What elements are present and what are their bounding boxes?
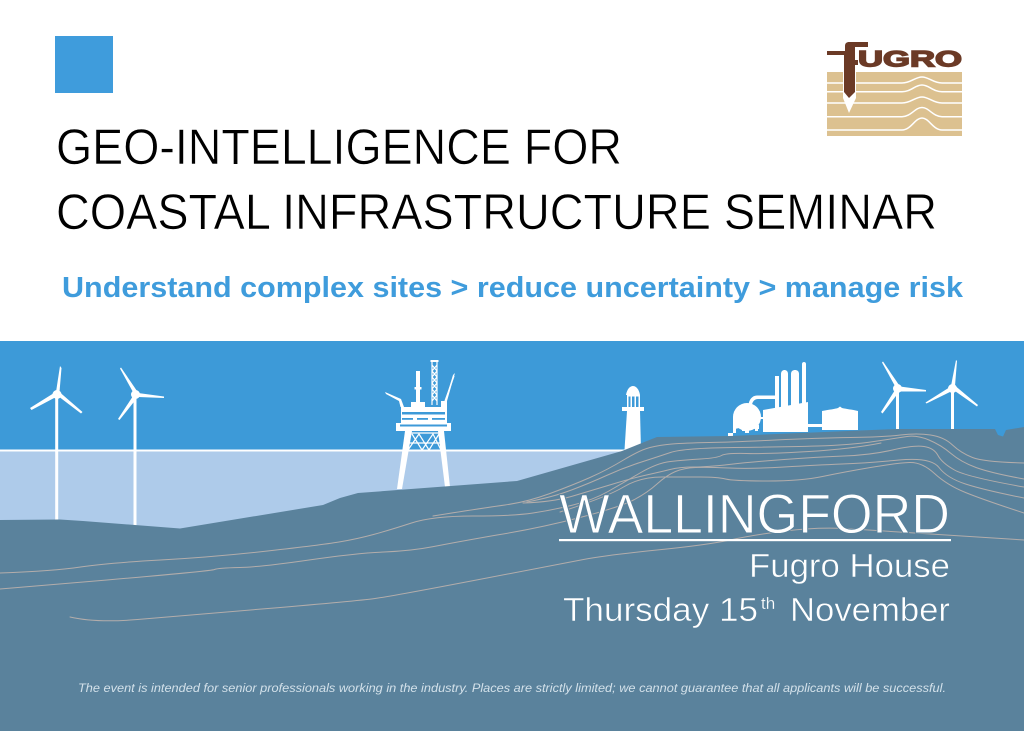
geological contour lines [0,434,1024,621]
icon: lighthouse [622,386,644,450]
event date: Thursday 15 [563,591,758,628]
icon: wind turbine 1 [30,366,82,522]
icon: offshore oil rig [385,360,455,489]
event date: November [790,591,950,628]
icon: wind turbine 2 [118,368,164,526]
sea [0,451,640,551]
title: COASTAL INFRASTRUCTURE SEMINAR [56,184,937,240]
icon: wind turbine 4 [926,360,978,432]
seabed and land [0,427,1024,731]
icon: Fugro logo [827,42,962,136]
icon: Fugro logo: UGRO [858,46,962,72]
title [56,119,937,240]
venue name: Fugro House [749,547,950,584]
sky band [0,341,1024,451]
title: GEO-INTELLIGENCE FOR [56,119,622,175]
subtitle: Understand complex sites > reduce uncertainty > manage risk [62,272,964,304]
horizon line [0,450,640,452]
blue square [55,36,113,93]
icon: refinery [728,362,858,437]
venue heading: WALLINGFORD [559,482,950,545]
icon: wind turbine 3 [881,362,926,432]
disclaimer note: The event is intended for senior professionals working in the industry. Places are strictly limited; we cannot guarantee that all applicants will be successful. [78,683,946,695]
event date: th [761,594,775,613]
